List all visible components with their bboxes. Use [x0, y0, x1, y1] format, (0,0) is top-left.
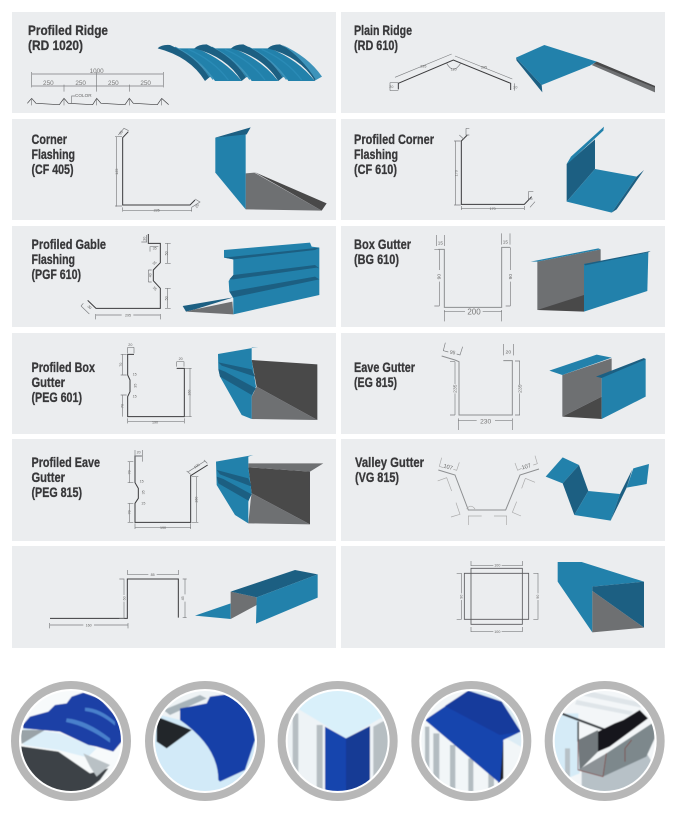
diagram: RD 610 profile: 120: [451, 68, 457, 72]
diagram: EG 815 profile: 230: [480, 418, 492, 425]
diagram: BG 610 profile: [434, 233, 514, 321]
panel: Profiled Gable Flashing: [12, 226, 336, 327]
diagram: PEG 815 profile: 20: [137, 451, 141, 455]
heading: Profiled Ridge: Profiled Ridge: [28, 22, 108, 38]
diagram: BG 610 profile: 15: [503, 239, 508, 244]
diagram: RD 610 profile: 20: [389, 85, 393, 89]
photo: hat flashing installed: [415, 685, 527, 797]
diagram: RD 610 profile: 20: [513, 86, 517, 90]
diagram: PGF 610 profile: 50: [164, 251, 168, 255]
heading: Profiled Box Gutter: Gutter: [32, 374, 65, 390]
icon: box cover: [558, 562, 644, 632]
heading: Corner Flashing: Flashing: [32, 146, 75, 162]
diagram: PEG 601 profile: 20: [128, 343, 132, 347]
icon: box gutter: [531, 248, 651, 312]
panel: Box Gutter: [341, 226, 665, 327]
diagram: PGF 610 profile: 50: [164, 296, 168, 300]
heading: Valley Gutter: (VG 815): [355, 469, 399, 485]
diagram: RD 1020 profile: 1000: [90, 68, 104, 75]
heading: Profiled Eave Gutter: Gutter: [32, 469, 65, 485]
diagram: RD 1020 profile: 250: [43, 80, 54, 87]
diagram: PEG 815 profile: 105: [193, 463, 200, 469]
heading: Plain Ridge: Plain Ridge: [354, 22, 412, 38]
diagram: PEG 601 profile: 70: [120, 404, 124, 408]
icon: corner flashing: [215, 127, 327, 211]
diagram: BG 610 profile: 200: [467, 307, 481, 316]
heading: Plain Ridge: (RD 610): [354, 37, 398, 53]
icon: profiled eave gutter: [216, 455, 323, 524]
diagram: PGF 610 profile: 40: [149, 273, 153, 277]
diagram: PEG 815 profile: 35: [142, 490, 146, 494]
diagram: box profile: 100: [494, 630, 500, 634]
diagram: PEG 815 profile: 190: [160, 526, 166, 530]
panel: Profiled Eave Gutter: [12, 439, 336, 541]
panel: unnamed hat profile: [12, 546, 336, 648]
panel: Valley Gutter: [341, 439, 665, 541]
diagram: PEG 815 profile: 160: [194, 497, 198, 503]
diagram: BG 610 profile: 15: [438, 241, 443, 246]
diagram: RD 1020 profile: 250: [108, 80, 119, 87]
panel: Profiled Corner Flashing: [341, 119, 665, 220]
heading: Profiled Eave Gutter: (PEG 815): [32, 484, 82, 500]
diagram: hat profile: 85: [151, 573, 155, 577]
diagram: RD 610 profile: 295: [420, 64, 426, 68]
diagram: PGF 610 profile: 35: [152, 286, 158, 291]
heading: Profiled Gable Flashing: (PGF 610): [32, 266, 81, 282]
heading: Profiled Gable Flashing: Profiled Gable: [32, 236, 106, 252]
diagram: PGF 610 profile: 35: [152, 260, 157, 266]
heading: Profiled Gable Flashing: Flashing: [32, 251, 75, 267]
heading: Corner Flashing: (CF 405): [32, 161, 74, 177]
diagram: PGF 610 profile: [81, 234, 171, 319]
photo: ridge end: [149, 685, 261, 797]
diagram: RD 1020 profile: COLOR: [75, 93, 92, 98]
diagram: PEG 601 profile: 70: [119, 363, 123, 367]
icon: hat flashing: [195, 570, 318, 624]
diagram: VG 815 profile: 107: [443, 464, 453, 472]
heading: Valley Gutter: Valley Gutter: [355, 454, 424, 470]
diagram: PEG 815 profile: 70: [128, 470, 132, 474]
diagram: VG 815 profile: 107: [521, 463, 532, 471]
icon: profiled corner flashing: [567, 127, 644, 213]
heading: Profiled Eave Gutter: Profiled Eave: [32, 454, 100, 470]
diagram: hat profile: 160: [86, 623, 92, 627]
diagram: PGF 610 profile: 30: [87, 304, 92, 310]
diagram: hat profile: 60: [122, 596, 126, 600]
heading: Profiled Corner Flashing: (CF 610): [354, 161, 397, 177]
diagram: PEG 815 profile: 70: [128, 510, 132, 514]
heading: Profiled Corner Flashing: Profiled Corner: [354, 131, 434, 147]
diagram: EG 815 profile: [442, 343, 523, 430]
panel: unnamed box profile: [341, 546, 665, 648]
diagram: PEG 601 profile: 190: [152, 420, 158, 424]
diagram: CF 405 profile: 25: [118, 130, 124, 136]
diagram: box profile: [457, 561, 540, 634]
panel: Plain Ridge: [341, 12, 665, 113]
icon: eave gutter: [549, 355, 646, 419]
diagram: CF 405 profile: 25: [194, 203, 200, 209]
icon: plain ridge sheet: [516, 45, 655, 92]
diagram: PEG 815 profile: 15: [140, 480, 144, 484]
diagram: RD 1020 profile: [27, 68, 169, 105]
photo: corner flashing installed: [282, 685, 394, 797]
panel: Corner Flashing: [12, 119, 336, 220]
diagram: PEG 601 profile: 15: [133, 394, 137, 398]
heading: Profiled Corner Flashing: Flashing: [354, 146, 398, 162]
diagram: CF 610 profile: 170: [490, 207, 496, 211]
diagram: PEG 815 profile: 15: [141, 501, 145, 505]
diagram: CF 610 profile: 170: [454, 170, 458, 176]
heading: Eave Gutter: Eave Gutter: [354, 359, 415, 375]
diagram: PEG 815 profile: [128, 450, 208, 530]
diagram: BG 610 profile: 90: [508, 274, 514, 279]
heading: Eave Gutter: (EG 815): [354, 374, 397, 390]
diagram: BG 610 profile: 90: [437, 274, 443, 279]
photo: ridge on roof: [15, 685, 127, 797]
heading: Profiled Box Gutter: Profiled Box: [32, 359, 95, 375]
photo: gutter installed: [549, 685, 661, 797]
diagram: hat profile: [50, 570, 187, 628]
diagram: RD 610 profile: 295: [481, 66, 487, 70]
heading: Profiled Ridge: (RD 1020): [28, 37, 83, 53]
icon: profiled box gutter: [218, 347, 317, 420]
diagram: PGF 610 profile: 35: [153, 246, 157, 250]
heading: Box Gutter: Box Gutter: [354, 236, 411, 252]
diagram: CF 405 profile: 225: [154, 209, 160, 213]
diagram: box profile: 100: [494, 564, 500, 568]
diagram: RD 1020 profile: 250: [140, 80, 151, 87]
diagram: PEG 601 profile: 20: [179, 357, 183, 361]
heading: Corner Flashing: Corner: [32, 131, 67, 147]
panel: Profiled Ridge: [12, 12, 336, 113]
diagram: hat profile: 45: [181, 596, 185, 600]
diagram: PGF 610 profile: 30: [142, 237, 146, 241]
panel: Eave Gutter: [341, 333, 665, 434]
diagram: PGF 610 profile: 295: [125, 313, 131, 317]
diagram: VG 815 profile: [438, 456, 539, 525]
diagram: box profile: 90: [536, 595, 540, 599]
diagram: RD 1020 profile: 250: [75, 80, 86, 87]
heading: Box Gutter: (BG 610): [354, 251, 399, 267]
icon: profiled ridge sheet: [158, 44, 322, 81]
diagram: box profile: 90: [460, 595, 464, 599]
diagram: RD 610 profile: [389, 54, 517, 91]
heading: Profiled Box Gutter: (PEG 601): [32, 389, 82, 405]
diagram: PEG 601 profile: 35: [133, 384, 137, 388]
diagram: CF 405 profile: 125: [115, 169, 119, 175]
diagram: EG 815 profile: 95: [449, 350, 456, 356]
icon: valley gutter: [546, 457, 649, 521]
icon: profiled gable flashing: [183, 243, 319, 314]
diagram: CF 405 profile: [115, 128, 200, 213]
diagram: EG 815 profile: 235: [517, 384, 523, 393]
panel: Profiled Box Gutter: [12, 333, 336, 434]
diagram: PEG 601 profile: [119, 343, 192, 424]
diagram: EG 815 profile: 235: [453, 384, 459, 393]
diagram: EG 815 profile: 20: [506, 350, 511, 356]
diagram: CF 610 profile: [454, 128, 535, 211]
diagram: PEG 601 profile: 15: [133, 372, 137, 376]
diagram: PEG 601 profile: 160: [188, 390, 192, 396]
